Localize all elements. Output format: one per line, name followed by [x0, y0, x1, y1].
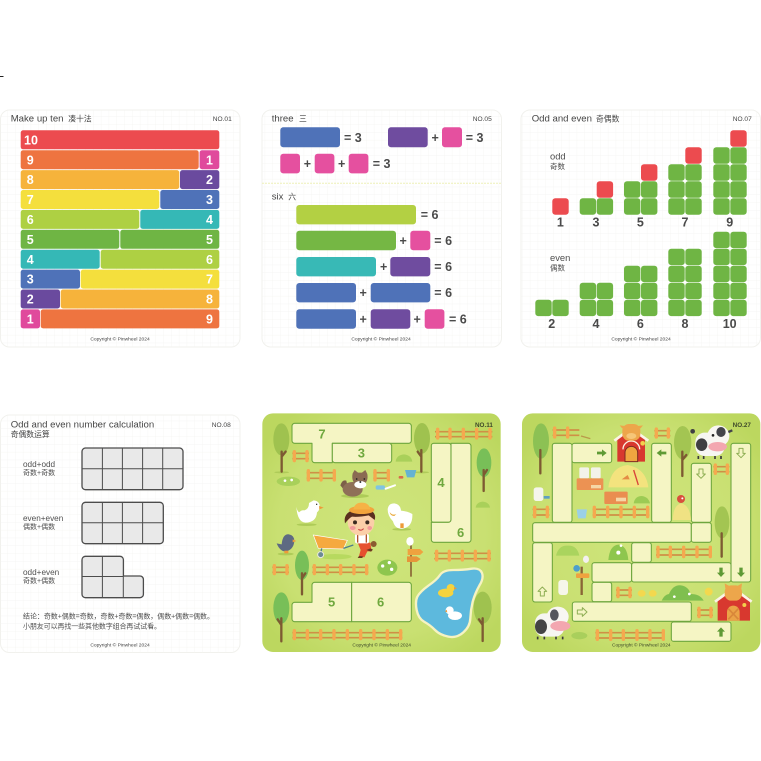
even column 4: 4: [593, 317, 600, 331]
equation: blue plus blue equals 6: +: [360, 286, 367, 300]
equation: purple plus pink equals 3: = 3: [466, 131, 483, 145]
flower bush: [608, 544, 628, 560]
bush small top: [396, 454, 412, 462]
card number: NO.01: [213, 116, 232, 123]
corner mark: [0, 76, 4, 77]
row 9+1: [21, 150, 219, 169]
puzzle tile middle: [592, 563, 632, 582]
white duck left: [296, 500, 324, 526]
conclusion text: 小朋友可以再找一些其他数字组合再试试看。: [23, 622, 161, 630]
odd column 9: [713, 130, 747, 230]
heading: six: 六: [288, 192, 296, 202]
fence by cow: [713, 465, 729, 473]
panel: odd and even number calculation: [0, 415, 240, 652]
even column 8: [668, 249, 702, 331]
dog: [340, 470, 369, 498]
tiny bush bottom: [571, 632, 587, 639]
puzzle tile 4: 4: [437, 475, 445, 490]
odd column 3: [580, 181, 613, 230]
row 6+4: [21, 210, 219, 229]
label: odd: 奇数: [550, 161, 565, 171]
grid: eight cells: [82, 502, 163, 544]
row 4+6: 4: [27, 253, 34, 267]
puzzle tile far right: [731, 443, 751, 582]
row 8+2: 8: [27, 173, 34, 187]
haystack: [608, 465, 648, 487]
chick right: [705, 588, 713, 596]
row 3+7: [21, 270, 219, 289]
even column 10: 10: [723, 317, 737, 331]
label: even+even: 偶数+偶数: [23, 522, 55, 531]
heading: calculation: 奇偶数运算: [11, 429, 50, 439]
panel: farm puzzle no.11: [262, 413, 501, 652]
fence right: [434, 551, 491, 560]
even column 10: [713, 232, 747, 331]
label: even+even: even+even: [23, 514, 64, 523]
yellow duck: [438, 584, 457, 597]
big bush: [662, 585, 704, 601]
row 1+9: 9: [206, 312, 213, 326]
label: odd+even: 奇数+偶数: [23, 576, 55, 585]
equation: green plus pink equals 6: = 6: [434, 234, 452, 248]
tree bottom left: [273, 592, 289, 641]
equation: blue plus blue equals 6: = 6: [434, 286, 452, 300]
white duck: [445, 606, 462, 620]
odd column 7: 7: [682, 216, 689, 230]
odd column 1: [552, 198, 569, 230]
signpost: [406, 537, 423, 577]
even column 2: 2: [548, 317, 555, 331]
heading: three: three: [272, 114, 294, 124]
fence lower middle: [312, 566, 368, 574]
row 3+7: 3: [27, 273, 34, 287]
puzzle tile small lower: [592, 582, 612, 602]
puzzle tile down arrow: [632, 563, 731, 582]
card number: NO.05: [473, 116, 492, 123]
puzzle tile hollow down: [691, 463, 711, 522]
fence lower left: [272, 566, 289, 574]
odd column 9: 9: [726, 216, 733, 230]
boy: [345, 503, 377, 558]
row 1+9: [21, 309, 219, 328]
barn with cow top: [614, 424, 648, 462]
row 2+8: 2: [27, 293, 34, 307]
label: odd+even: odd+even: [23, 568, 60, 577]
row 7+3: 3: [206, 193, 213, 207]
label: even+even: [23, 514, 64, 531]
odd column 7: [668, 147, 702, 230]
bird on hay: [673, 495, 691, 520]
tree lower left: [295, 551, 309, 594]
equation: purple plus pink equals 3: +: [432, 131, 439, 145]
row 2+8: [21, 290, 219, 308]
puzzle tile 6 lower: [352, 582, 411, 622]
cow bottom: [535, 607, 570, 639]
puzzle tile 5: [292, 582, 352, 622]
tree left: [533, 423, 549, 473]
small dark duck: [277, 534, 296, 555]
card number: NO.08: [212, 422, 231, 429]
fence top right: [435, 429, 492, 438]
puzzle tile hollow right: [572, 602, 691, 621]
tree middle: [674, 426, 691, 476]
equation: blue bar equals 3: = 3: [344, 131, 362, 145]
equation: three pinks equal 3: [280, 154, 390, 173]
heading: make up ten: 凑十法: [68, 114, 92, 124]
label: odd+even: [23, 568, 60, 585]
puzzle tile 5: 5: [328, 595, 335, 610]
row 4+6: [21, 250, 219, 269]
row 9+1: 9: [27, 153, 34, 167]
panel: three and six: [262, 110, 502, 347]
heading: calculation: [11, 420, 154, 439]
fence bottom: [292, 631, 402, 639]
even column 8: 8: [682, 317, 689, 331]
bucket: [577, 509, 587, 518]
fence small left: [292, 452, 309, 461]
fence middle: [593, 507, 649, 517]
puzzle tile 6 lower: 6: [377, 595, 384, 610]
row 5+5: 5: [206, 233, 213, 247]
signpost with bird: [573, 556, 589, 595]
fence by dog: [373, 471, 390, 480]
row 5+5: 5: [27, 233, 34, 247]
card number: NO.27: [733, 422, 751, 429]
milk crate: [577, 467, 603, 490]
card number: NO.07: [733, 116, 752, 123]
small bush: [634, 496, 650, 503]
tree top middle: [414, 423, 430, 473]
card number: NO.11: [475, 422, 493, 429]
copyright: Copyright © Pinwheel 2024: [611, 336, 671, 343]
row 5+5: [21, 230, 219, 249]
tree right: [477, 448, 491, 491]
row 10: [21, 130, 219, 149]
crate: [604, 492, 628, 504]
equation: teal plus purple equals 6: +: [380, 260, 387, 274]
heading: calculation: Odd and even number calculation: [11, 420, 154, 430]
puzzle tile 7: [292, 423, 411, 463]
bush small right: [476, 502, 490, 508]
row 8+2: 2: [206, 173, 213, 187]
equation: lime bar equals 6: = 6: [421, 208, 438, 222]
label: odd+odd: [23, 460, 56, 477]
equation: blue plus purple plus pink equals 6: +: [360, 312, 367, 326]
white duck right: [388, 503, 412, 531]
milk bottle: [558, 580, 568, 595]
puzzle tile 7: 7: [318, 427, 326, 442]
equation: blue plus purple plus pink equals 6: = 6: [449, 312, 467, 326]
equation: blue bar equals 3: [280, 127, 362, 147]
copyright: Copyright © Pinwheel 2024: [90, 336, 150, 343]
equation: teal plus purple equals 6: [296, 257, 452, 276]
row 9+1: 1: [206, 153, 213, 167]
even column 6: [624, 266, 657, 331]
chicks: [638, 590, 657, 597]
copyright: Copyright © Pinwheel 2024: [90, 642, 150, 648]
tree bottom right: [474, 592, 492, 641]
panel: farm puzzle no.27: [522, 413, 760, 652]
copyright: Copyright © Pinwheel 2024: [351, 336, 411, 343]
puzzle tile column left: [552, 443, 572, 522]
label: even: 偶数: [550, 262, 565, 272]
equation: three pinks equal 3: +: [304, 157, 311, 171]
equation: lime bar equals 6: [296, 205, 438, 224]
conclusion text: 结论：奇数+偶数=奇数，奇数+奇数=偶数，偶数+偶数=偶数。: [23, 612, 214, 620]
panel: make up ten: [0, 110, 240, 347]
puzzle tile 6 upper: [431, 443, 471, 542]
equation: teal plus purple equals 6: = 6: [434, 260, 452, 274]
puzzle tile 3: 3: [358, 446, 365, 461]
fence top left: [553, 428, 590, 439]
cow top: [690, 425, 732, 459]
puzzle tile small center: [632, 543, 651, 562]
odd column 5: [624, 164, 657, 230]
label: odd+odd: 奇数+奇数: [23, 468, 55, 477]
puzzle tile right arrow: [572, 443, 612, 463]
puzzle tile long horizontal: [533, 523, 691, 542]
label: odd: [550, 150, 566, 171]
bushes mid: [556, 546, 579, 556]
puzzle tile hollow up: [533, 543, 552, 602]
copyright: Copyright © Pinwheel 2024: [352, 642, 411, 649]
row 10: 10: [24, 133, 38, 147]
bucket and toy: [399, 470, 416, 479]
even column 2: [535, 300, 569, 331]
heading: make up ten: Make up ten: [11, 114, 64, 124]
heading: six: six: [272, 192, 283, 202]
boy with wheelbarrow: [313, 503, 377, 559]
row 6+4: 4: [206, 213, 213, 227]
row 8+2: [21, 170, 219, 189]
equation: blue plus purple plus pink equals 6: +: [414, 312, 421, 326]
even column 4: [580, 283, 613, 331]
label: even: [550, 252, 570, 272]
row 7+3: [21, 190, 219, 209]
row 2+8: 8: [206, 293, 213, 307]
fence upper middle: [307, 471, 336, 480]
odd column 1: 1: [557, 216, 564, 230]
bowl and bone: [376, 485, 395, 490]
row 1+9: 1: [27, 312, 34, 326]
equation: three pinks equal 3: +: [338, 157, 345, 171]
fence top middle: [654, 429, 670, 437]
odd column 5: 5: [637, 216, 644, 230]
equation: blue plus blue equals 6: [296, 283, 452, 302]
label: odd+odd: odd+odd: [23, 460, 56, 469]
row 7+3: 7: [27, 193, 34, 207]
grid: five cells: [82, 556, 143, 598]
equation: green plus pink equals 6: +: [400, 234, 407, 248]
puzzle tile 4: [431, 443, 451, 522]
fence right middle: [656, 547, 712, 557]
puzzle tile up arrow: [671, 622, 731, 641]
conclusion text: [23, 612, 214, 630]
milk can: [534, 487, 550, 501]
equation: green plus pink equals 6: [296, 231, 452, 250]
even column 6: 6: [637, 317, 644, 331]
tree top left: [273, 423, 289, 473]
equation: purple plus pink equals 3: [388, 127, 483, 147]
panel: odd and even: [521, 110, 760, 347]
fence lower right: [697, 608, 713, 617]
row 6+4: 6: [27, 213, 34, 227]
label: even: even: [550, 252, 570, 263]
heading: three: 三: [299, 114, 307, 124]
puzzle tile 3: [332, 443, 392, 463]
barn with cat: [715, 583, 752, 621]
grid: ten cells: [82, 448, 183, 490]
puzzle tile 6 upper: 6: [457, 525, 464, 540]
equation: blue plus purple plus pink equals 6: [296, 309, 467, 329]
equation: three pinks equal 3: = 3: [373, 157, 390, 171]
flower bush: [377, 560, 397, 576]
fence lower: [616, 588, 632, 597]
heading: odd and even: Odd and even: [532, 114, 592, 124]
row 4+6: 6: [206, 253, 213, 267]
row 3+7: 7: [206, 273, 213, 287]
label: odd: odd: [550, 150, 566, 162]
odd column 3: 3: [593, 216, 600, 230]
fence left: [533, 507, 549, 517]
puzzle tile small right: [691, 523, 711, 542]
tree right: [715, 506, 729, 557]
copyright: Copyright © Pinwheel 2024: [612, 642, 671, 649]
fence bottom: [595, 631, 665, 639]
heading: odd and even: 奇偶数: [596, 114, 620, 124]
bush with flowers top: [277, 477, 300, 486]
pond: [416, 569, 483, 637]
puzzle tile left arrow: [652, 443, 671, 522]
